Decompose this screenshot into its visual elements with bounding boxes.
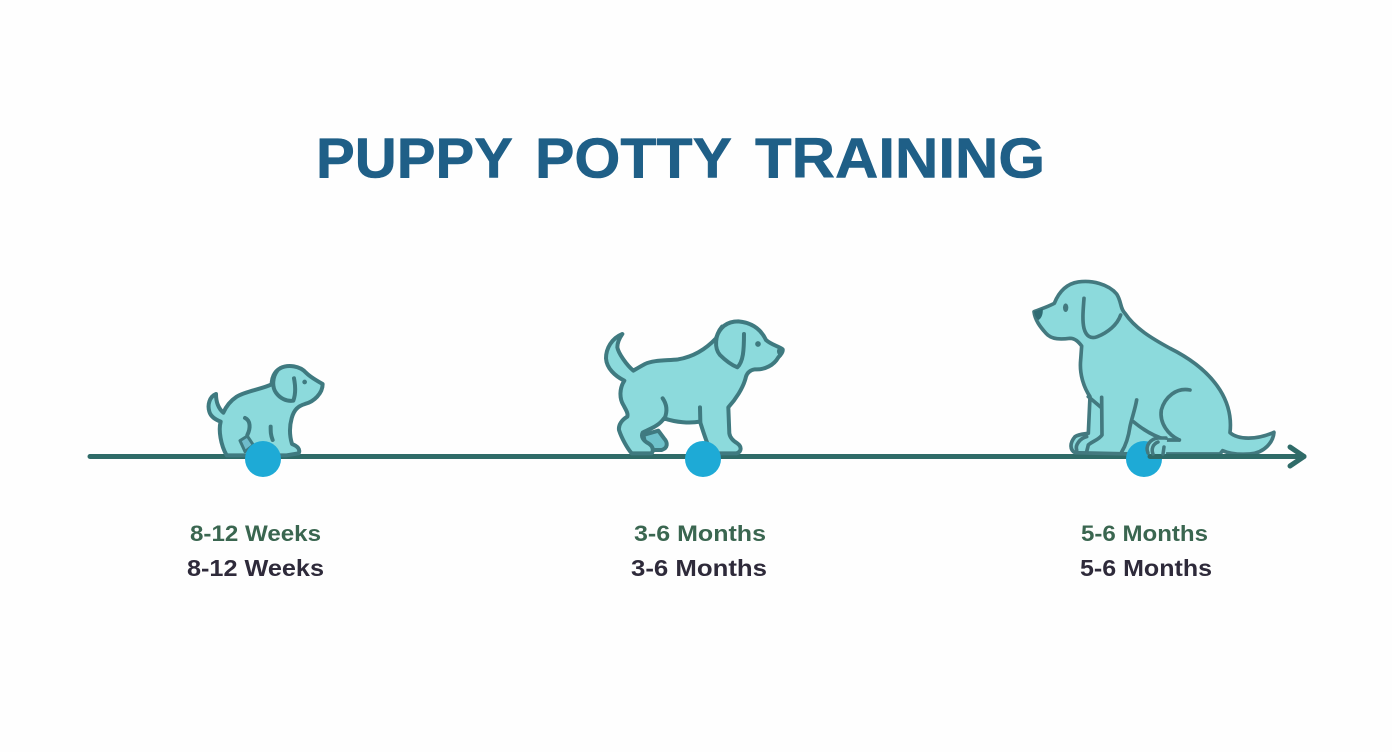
label dark: 5-6 Months [1080, 555, 1212, 581]
nose [1034, 309, 1043, 320]
eye [1063, 303, 1068, 312]
puppy 1: 8-12 weeks [209, 366, 323, 455]
label green: 8-12 Weeks [190, 521, 321, 546]
marker dot 1 [245, 441, 281, 477]
title: PUPPY [316, 126, 513, 190]
title [316, 126, 1045, 190]
arrow and axis right segment [1150, 447, 1304, 466]
label green: 3-6 Months [634, 521, 766, 546]
puppy 3: 5-6 months [1034, 281, 1274, 454]
marker dot 2 [685, 441, 721, 477]
label dark: 3-6 Months [631, 555, 767, 581]
label group: 3-6 months [631, 521, 767, 581]
label group: 5-6 months [1080, 521, 1212, 581]
label dark: 8-12 Weeks [187, 555, 324, 581]
label group: 8-12 weeks [187, 521, 324, 581]
nose [777, 347, 783, 355]
title: POTTY [535, 126, 732, 190]
eye [755, 341, 761, 347]
marker dot 3 [1126, 441, 1162, 477]
title: TRAINING [755, 126, 1045, 190]
puppy 2: 3-6 months [606, 321, 783, 453]
rear paw of puppy 3 [1147, 438, 1167, 454]
eye [302, 380, 307, 384]
label green: 5-6 Months [1081, 521, 1208, 546]
timeline axis [90, 454, 1302, 459]
